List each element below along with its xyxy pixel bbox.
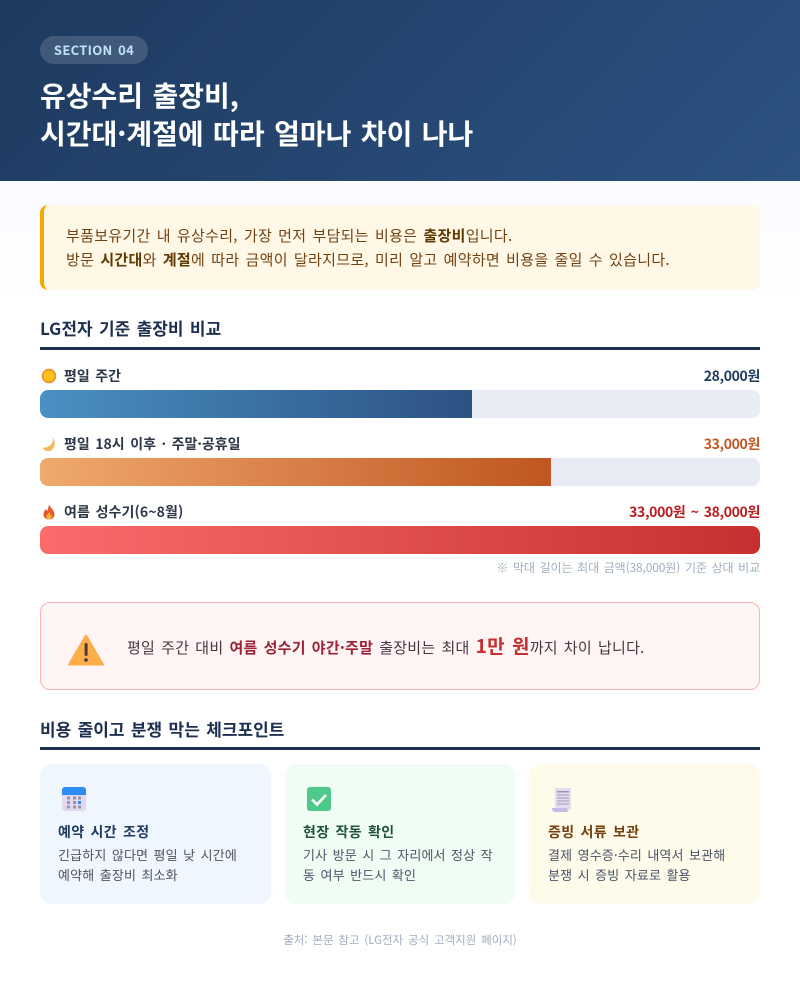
section badge xyxy=(40,36,148,64)
intro callout: 부품보유기간 내 유상수리, 가장 먼저 부담되는 비용은 출장비입니다. xyxy=(66,224,512,246)
heading: fee comparison xyxy=(40,319,760,350)
bar: evening and weekend xyxy=(40,458,760,486)
heading: checkpoints: 비용 줄이고 분쟁 막는 체크포인트 xyxy=(40,716,284,741)
header banner xyxy=(0,0,800,181)
value: evening and weekend: 33,000원 xyxy=(704,434,760,454)
card description: 결제 영수증·수리 내역서 보관해 xyxy=(548,845,725,864)
card: keep receipts xyxy=(529,764,760,904)
bar: summer peak xyxy=(40,526,760,554)
intro callout xyxy=(40,205,760,290)
icon: sun xyxy=(42,368,56,384)
icon: warning triangle xyxy=(68,634,104,666)
value: weekday daytime: 28,000원 xyxy=(704,366,760,386)
card title: 현장 작동 확인 xyxy=(303,822,395,842)
heading: checkpoints xyxy=(40,720,760,750)
label: weekday daytime: 평일 주간 xyxy=(64,366,121,386)
card title: 예약 시간 조정 xyxy=(58,822,150,842)
label: evening and weekend: 평일 18시 이후 · 주말·공휴일 xyxy=(64,434,241,454)
card description: 분쟁 시 증빙 자료로 활용 xyxy=(548,865,691,884)
title: 시간대·계절에 따라 얼마나 차이 나나 xyxy=(40,113,473,153)
card description: 기사 방문 시 그 자리에서 정상 작 xyxy=(303,845,493,864)
card description xyxy=(58,845,237,884)
icon: calendar xyxy=(62,787,86,811)
intro callout: 방문 시간대와 계절에 따라 금액이 달라지므로, 미리 알고 예약하면 비용을 줄일 수 있습니다. xyxy=(66,249,670,270)
icon: moon xyxy=(42,438,55,452)
icon: fire xyxy=(44,504,54,520)
card description: 긴급하지 않다면 평일 낮 시간에 xyxy=(58,845,237,864)
label: summer peak: 여름 성수기(6~8월) xyxy=(64,502,183,522)
title xyxy=(40,75,473,153)
icon: receipt xyxy=(552,788,571,812)
card description xyxy=(303,845,493,884)
card title: 증빙 서류 보관 xyxy=(548,822,640,842)
section badge: SECTION 04 xyxy=(54,40,134,59)
bar chart: fee comparison xyxy=(40,366,760,554)
bar: weekday daytime xyxy=(40,390,760,418)
warning text: 평일 주간 대비 여름 성수기 야간·주말 출장비는 최대 1만 원까지 차이 납니다. xyxy=(127,632,645,659)
card: reservation time xyxy=(40,764,271,904)
value: summer peak: 33,000원 ~ 38,000원 xyxy=(629,502,760,522)
source note: 출처: 본문 참고 (LG전자 공식 고객지원 페이지) xyxy=(283,932,517,948)
card: on-site check xyxy=(285,764,515,904)
card description: 예약해 출장비 최소화 xyxy=(58,865,178,884)
warning panel xyxy=(40,602,760,690)
card description: 동 여부 반드시 확인 xyxy=(303,865,416,884)
title: 유상수리 출장비, xyxy=(40,75,239,115)
heading: fee comparison: LG전자 기준 출장비 비교 xyxy=(40,315,221,340)
icon: check mark xyxy=(307,787,331,811)
card description xyxy=(548,845,725,884)
chart footnote: ※ 막대 길이는 최대 금액(38,000원) 기준 상대 비교 xyxy=(496,559,760,576)
